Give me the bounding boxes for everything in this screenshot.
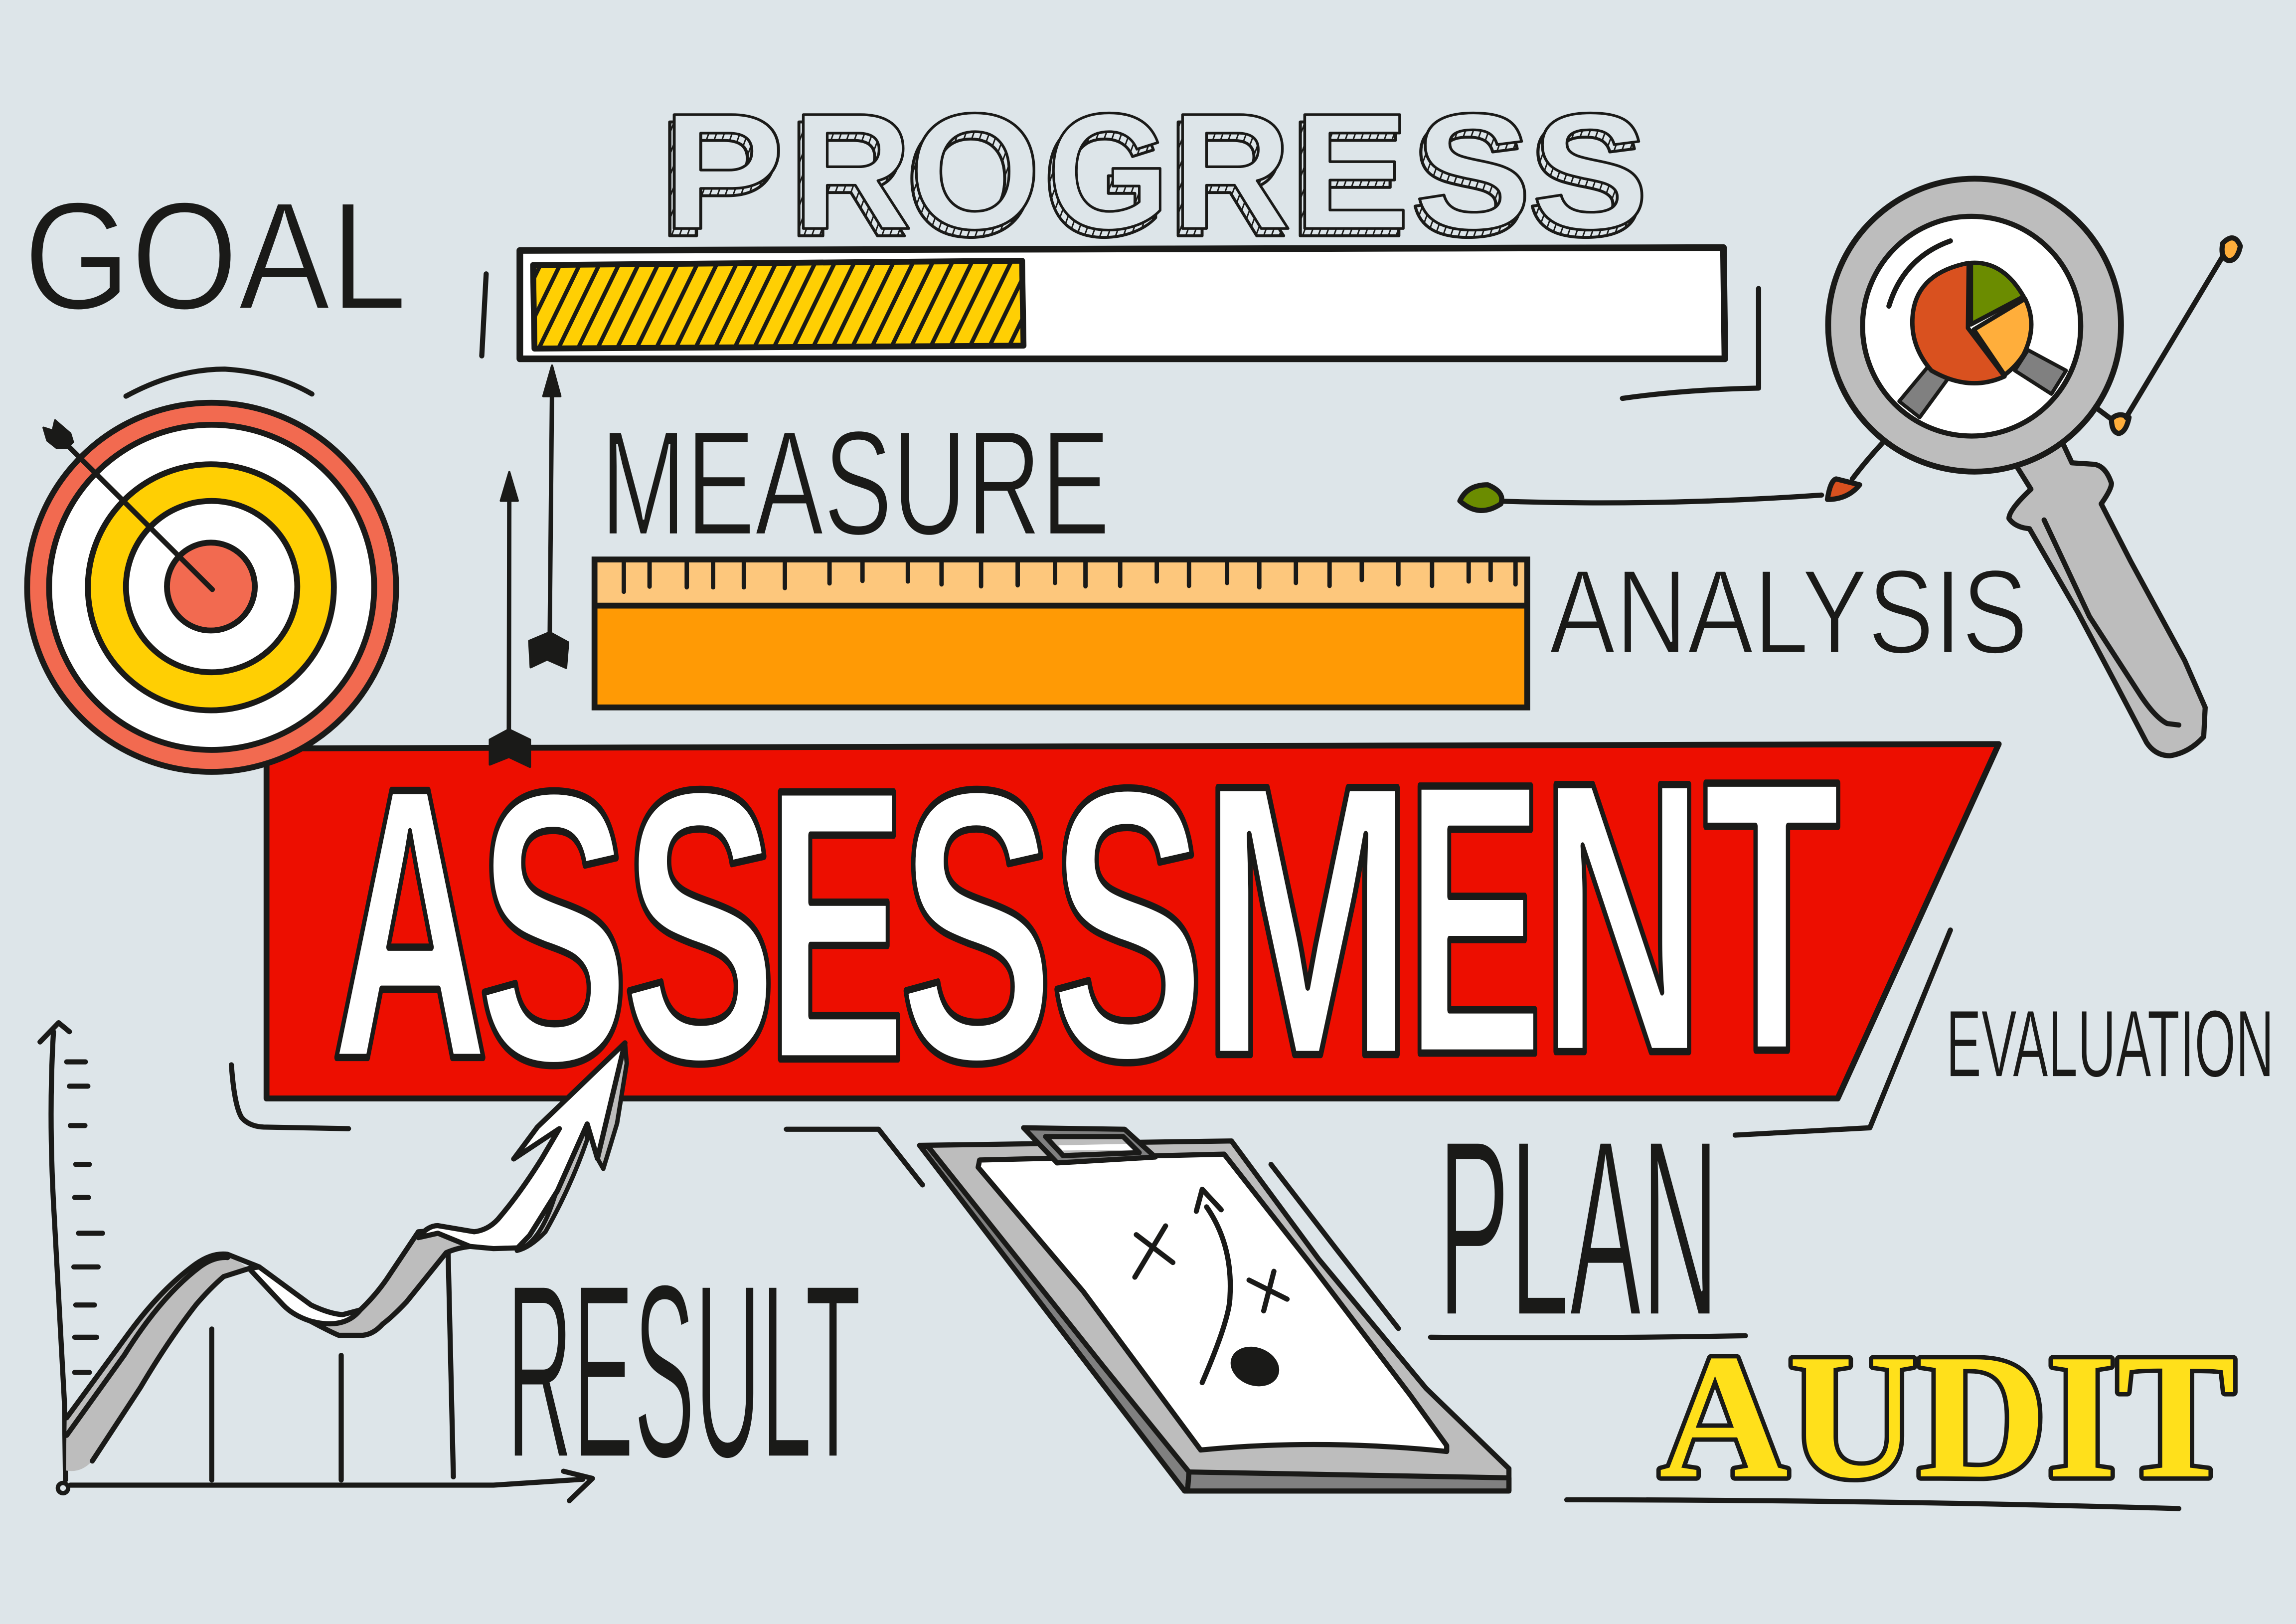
dot bbox=[1225, 1340, 1285, 1393]
grey ribbon, middle bbox=[311, 1230, 470, 1335]
banner title text: A bbox=[331, 706, 489, 1140]
heading: PROGRESS: E bbox=[1293, 79, 1410, 264]
banner title text: M bbox=[1201, 703, 1415, 1137]
heading: PROGRESS: E bbox=[1289, 87, 1406, 271]
crosses bbox=[1135, 1226, 1173, 1277]
ruler bbox=[595, 559, 1527, 708]
heading: PROGRESS: P bbox=[657, 87, 781, 271]
label: PLAN bbox=[1431, 1088, 1745, 1369]
banner title text: T bbox=[1703, 699, 1840, 1132]
white arrow bbox=[418, 1043, 625, 1249]
heading: PROGRESS: O bbox=[905, 87, 1037, 271]
icon: magnifying glass with pie chart bbox=[1828, 179, 2205, 756]
heading: PROGRESS: O bbox=[909, 79, 1041, 264]
heading: PROGRESS: S bbox=[1410, 87, 1527, 271]
banner title text: S bbox=[1050, 708, 1205, 1141]
chart: rising result graph with arrow bbox=[40, 1023, 627, 1501]
paper bbox=[978, 1154, 1447, 1451]
banner title text: E bbox=[766, 708, 906, 1141]
banner title text: S bbox=[478, 711, 630, 1144]
pie chart bbox=[1912, 263, 2031, 383]
board bbox=[920, 1141, 1509, 1491]
label: AUDIT: AUDIT bbox=[1659, 1317, 2236, 1515]
banner: ASSESSMENT bbox=[267, 699, 1999, 1144]
banner title text bbox=[331, 699, 1840, 1144]
grey ribbon, left hump bbox=[66, 1254, 249, 1471]
heading: PROGRESS: G bbox=[1047, 79, 1170, 264]
heading: PROGRESS: P bbox=[662, 79, 785, 264]
text: RESULT bbox=[506, 1232, 861, 1510]
banner title text: S bbox=[622, 709, 778, 1143]
play arrow bbox=[1202, 1207, 1230, 1383]
progress bar bbox=[482, 247, 1759, 398]
icon: clipboard with play diagram bbox=[920, 1128, 1509, 1491]
bracket lines around banner bbox=[231, 930, 1951, 1185]
white ribbon, dip bbox=[249, 1267, 360, 1325]
heading: PROGRESS: R bbox=[792, 79, 912, 264]
heading: PROGRESS: S bbox=[1415, 79, 1532, 264]
motion line bbox=[1271, 1164, 1398, 1328]
heading: PROGRESS: G bbox=[1043, 87, 1165, 271]
up arrows bbox=[490, 365, 568, 767]
label: ANALYSIS: ANALYSIS bbox=[1549, 545, 2028, 679]
handle bbox=[2009, 441, 2205, 756]
banner title text: E bbox=[1406, 702, 1543, 1135]
connector dots and lines around the magnifier bbox=[1460, 238, 2240, 511]
icon: target with arrow bbox=[27, 369, 396, 772]
heading: PROGRESS bbox=[657, 79, 1649, 271]
heading: PROGRESS: S bbox=[1532, 79, 1649, 264]
heading: PROGRESS: R bbox=[1171, 79, 1292, 264]
label: MEASURE: MEASURE bbox=[600, 400, 1110, 566]
banner title text: S bbox=[899, 709, 1054, 1143]
text: PLAN bbox=[1438, 1088, 1719, 1369]
banner title text: N bbox=[1540, 700, 1704, 1134]
heading: PROGRESS: S bbox=[1527, 87, 1644, 271]
label: GOAL: GOAL bbox=[23, 171, 407, 342]
clip bbox=[1023, 1128, 1155, 1163]
heading: PROGRESS: R bbox=[788, 87, 908, 271]
arrow shadow strips bbox=[517, 1125, 587, 1251]
heading: PROGRESS: R bbox=[1167, 87, 1287, 271]
